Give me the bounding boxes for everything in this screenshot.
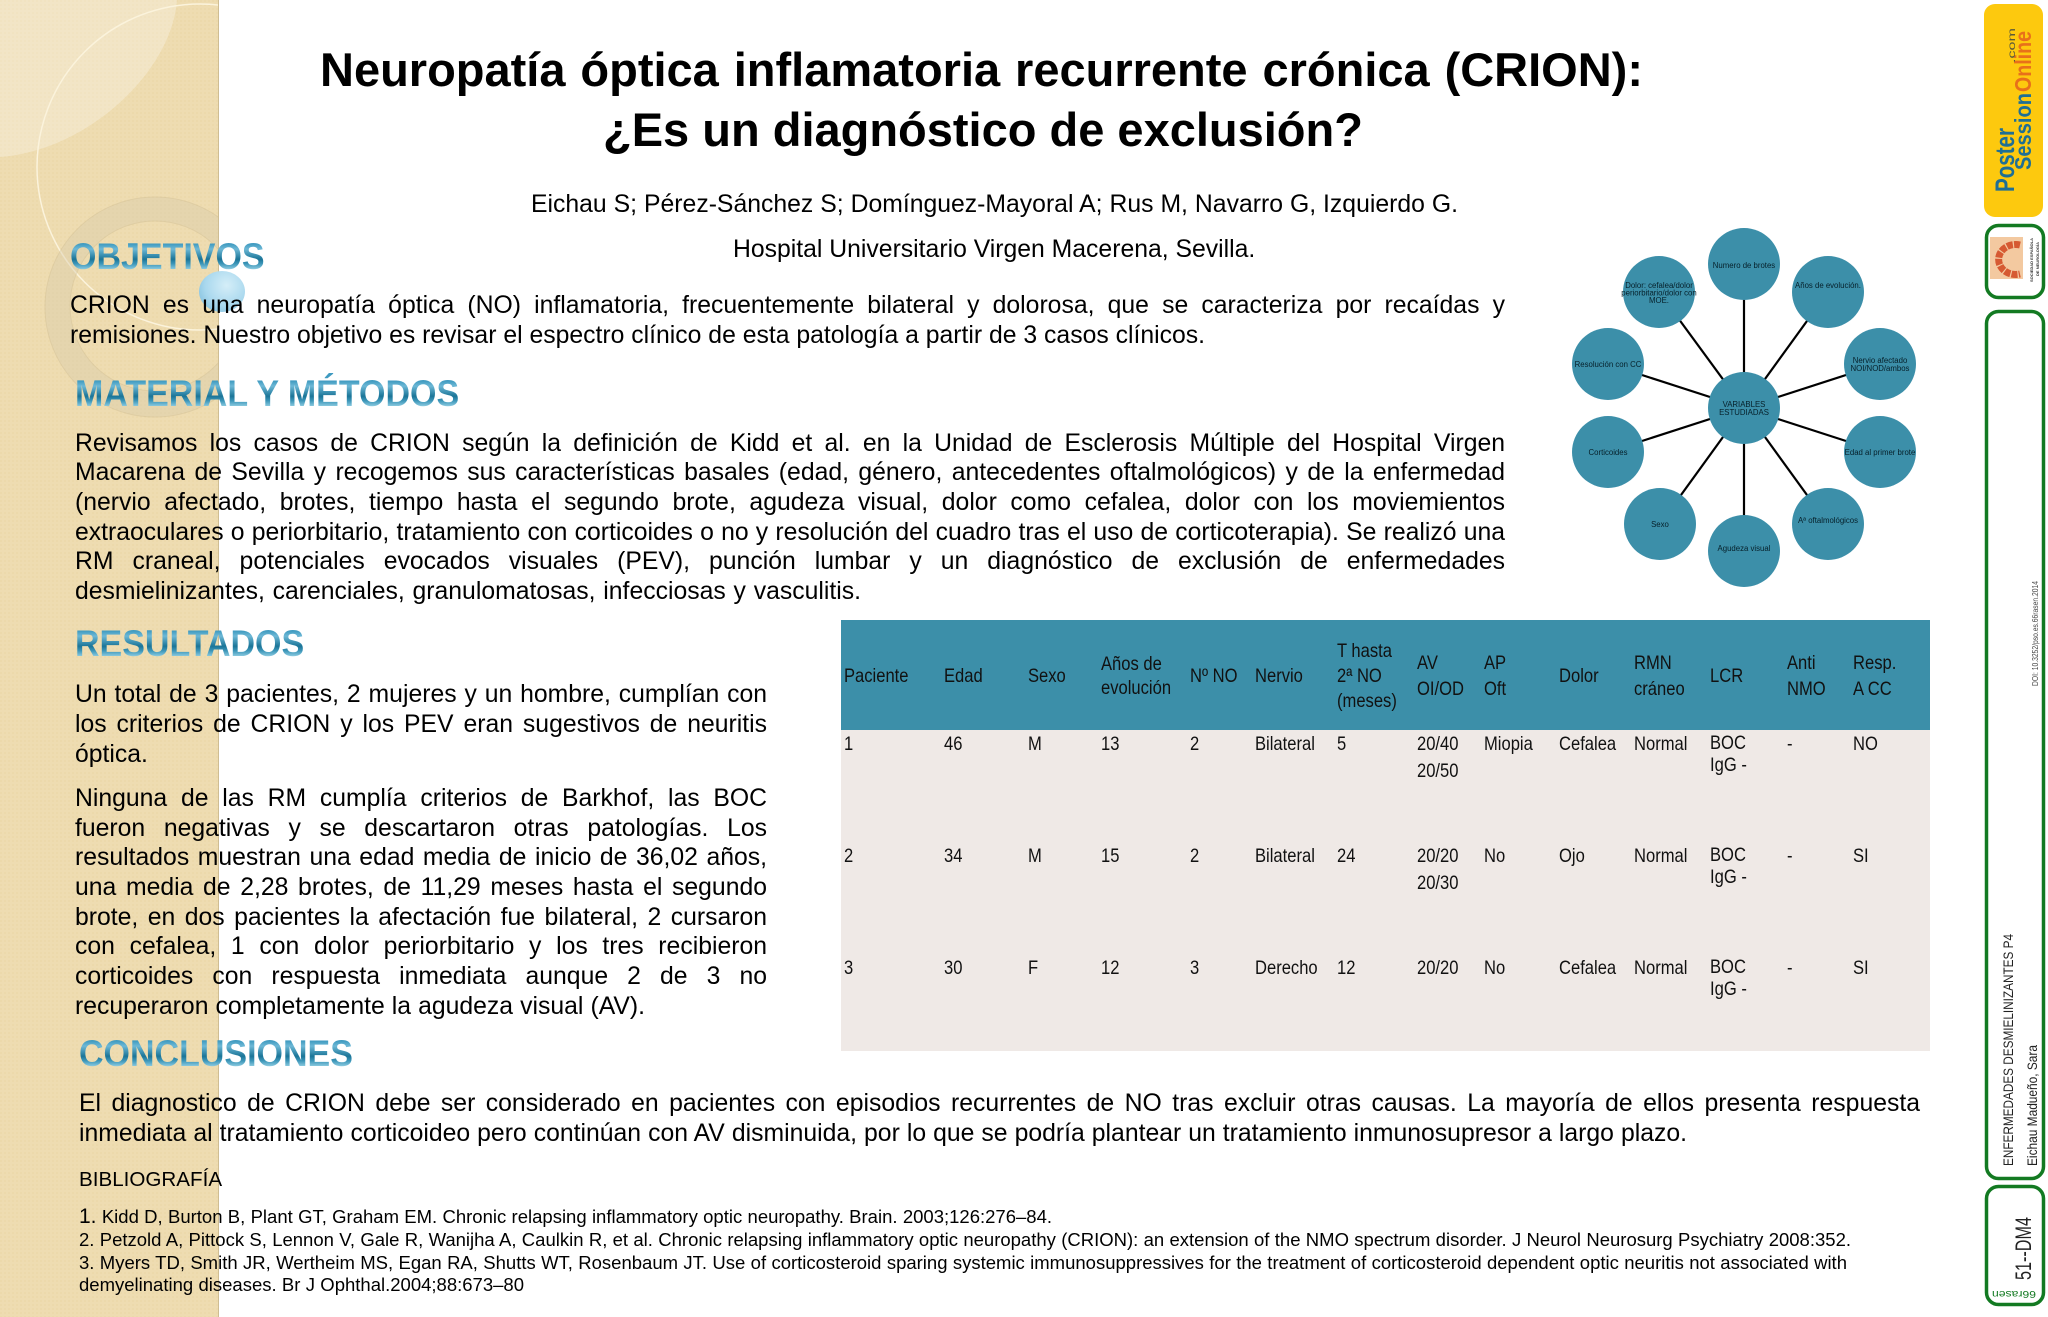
- table row: patient 2: 20/30: [1417, 872, 1458, 894]
- text: material y metodos: RM craneal, potenciales evocados visuales (PEV), punción lumbar y un diagnóstico de exclusión de enfermedades: [75, 548, 1505, 575]
- logo: sociedad de neurologia: SOCIEDAD ESPAÑOLA: [2029, 238, 2034, 282]
- text: objetivos: CRION es una neuropatía óptica (NO) inflamatoria, frecuentemente bilateral y dolorosa, que se caracteriza por recaídas y: [70, 292, 1505, 319]
- logo: sociedad de neurologia: [1986, 226, 2044, 298]
- logo: PosterSessionOnline: .com: [2007, 28, 2018, 63]
- table header row: Nervio: [1255, 665, 1303, 687]
- text: resultados: Ninguna de las RM cumplía criterios de Barkhof, las BOC: [75, 785, 767, 812]
- table header row: Años de: [1101, 653, 1162, 675]
- diagram: variables estudiadas: Dolor: cefalea/dolor: [1625, 281, 1693, 290]
- table header row: Oft: [1484, 678, 1506, 700]
- text: material y metodos: desmielinizantes, carenciales, granulomatosas, infecciosas y vasculitis.: [75, 578, 861, 605]
- table header row: A CC: [1853, 678, 1892, 700]
- references: 3. Myers TD, Smith JR, Wertheim MS, Egan RA, Shutts WT, Rosenbaum JT. Use of corticosteroid sparing systemic immunosuppressives for the treatment of corticosteroid dependent optic neuritis not associated with: [79, 1252, 1847, 1272]
- diagram: variables estudiadas: MOE.: [1649, 296, 1669, 305]
- text: conclusiones: [79, 1090, 1920, 1147]
- table row: patient 1: 20/50: [1417, 760, 1458, 782]
- panel: poster code: 51--DM4: [2011, 1217, 2036, 1280]
- table row: patient 3: Cefalea: [1559, 957, 1616, 979]
- text: material y metodos: extraoculares o periorbitario, tratamiento con corticoides o no y resolución del cuadro tras el uso de corticoterapia). Se realizó una: [75, 519, 1505, 546]
- table row: patient 1: 20/40: [1417, 733, 1458, 755]
- table row: patient 1: Cefalea: [1559, 733, 1616, 755]
- table header row: AV: [1417, 652, 1438, 674]
- text: resultados: [75, 681, 767, 1020]
- panel: poster information: [1986, 312, 2044, 1178]
- table row: patient 1: BOC: [1710, 732, 1746, 754]
- left decorative sidebar: [0, 0, 219, 1317]
- table row: patient 3: 20/20: [1417, 957, 1458, 979]
- table row: patient 2: IgG -: [1710, 866, 1747, 888]
- diagram: variables estudiadas: NOI/NOD/ambos: [1851, 364, 1910, 373]
- diagram: variables estudiadas: Corticoides: [1588, 448, 1628, 457]
- table row: patient 2: Bilateral: [1255, 845, 1315, 867]
- table row: patient 1: M: [1028, 733, 1042, 755]
- table row: patient 2: 2: [844, 845, 853, 867]
- table: patient data: [841, 620, 1930, 1051]
- table row: patient 1: 46: [944, 733, 962, 755]
- table row: patient 3: IgG -: [1710, 978, 1747, 1000]
- logo: PosterSessionOnline: Session: [2010, 93, 2036, 170]
- table row: patient 1: Miopia: [1484, 733, 1533, 755]
- table row: patient 2: BOC: [1710, 844, 1746, 866]
- text: resultados: recuperaron completamente la agudeza visual (AV).: [75, 993, 645, 1020]
- text: material y metodos: (nervio afectado, brotes, tiempo hasta el segundo brote, agudeza visual, dolor como cefalea, dolor con los moviemientos: [75, 489, 1505, 516]
- table header row: cráneo: [1634, 678, 1685, 700]
- table row: patient 1: [844, 732, 1878, 782]
- table row: patient 3: Derecho: [1255, 957, 1318, 979]
- text: resultados: Un total de 3 pacientes, 2 mujeres y un hombre, cumplían con: [75, 681, 767, 708]
- text: conclusiones: inmediata al tratamiento corticoideo pero continúan con AV disminuida, por lo que se podría plantear un tratamiento inmunosupresor a largo plazo.: [79, 1120, 1687, 1147]
- table row: patient 1: 5: [1337, 733, 1346, 755]
- diagram: variables estudiadas: Sexo: [1651, 520, 1670, 529]
- table row: patient 3: No: [1484, 957, 1505, 979]
- logo: PosterSessionOnline: [1984, 4, 2043, 217]
- table header row: RMN: [1634, 652, 1672, 674]
- diagram: variables estudiadas: periorbitario/dolor con: [1621, 288, 1697, 298]
- right sidebar: poster session: [1984, 4, 2046, 1306]
- table header row: NMO: [1787, 678, 1826, 700]
- table header row: Edad: [944, 665, 983, 687]
- diagram: variables estudiadas: Resolución con CC: [1575, 360, 1642, 369]
- text: resultados: brote, en dos pacientes la afectación fue bilateral, 2 cursaron: [75, 904, 767, 931]
- panel: poster information: Eichau Madueño, Sara: [2024, 1045, 2040, 1166]
- diagram: variables estudiadas: Edad al primer brote: [1845, 448, 1915, 457]
- references: 1. Kidd D, Burton B, Plant GT, Graham EM. Chronic relapsing inflammatory optic neuropathy. Brain. 2003;126:276–84.: [79, 1205, 1052, 1228]
- text: material y metodos: Revisamos los casos de CRION según la definición de Kidd et al. en la Unidad de Esclerosis Múltiple del Hospital Virgen: [75, 430, 1505, 456]
- text: resultados: fueron negativas y se descartaron otras patologías. Los: [75, 815, 767, 842]
- text: objetivos: [70, 292, 1505, 349]
- table row: patient 2: M: [1028, 845, 1042, 867]
- diagram: variables estudiadas: Aª oftalmológicos: [1798, 516, 1858, 525]
- table row: patient 1: 2: [1190, 733, 1199, 755]
- table header row: [841, 620, 1930, 730]
- table row: patient 1: Bilateral: [1255, 733, 1315, 755]
- table row: patient 2: SI: [1853, 845, 1869, 867]
- table row: patient 2: 24: [1337, 845, 1355, 867]
- table row: patient 2: 20/20: [1417, 845, 1458, 867]
- table header row: evolución: [1101, 677, 1171, 699]
- table row: patient 1: IgG -: [1710, 754, 1747, 776]
- table header row: Nº NO: [1190, 665, 1237, 687]
- table header row: OI/OD: [1417, 678, 1464, 700]
- text: resultados: una media de 2,28 brotes, de 11,29 meses hasta el segundo: [75, 874, 767, 901]
- table header row: Resp.: [1853, 652, 1896, 674]
- table row: patient 2: Ojo: [1559, 845, 1585, 867]
- heading: resultados: RESULTADOS: [75, 623, 304, 665]
- table row: patient 1: -: [1787, 733, 1793, 755]
- diagram: variables estudiadas: Numero de brotes: [1713, 261, 1775, 270]
- table row: patient 3: 3: [844, 957, 853, 979]
- title: Neuropatía óptica inflamatoria recurrente crónica (CRION):: [320, 43, 1643, 96]
- table row: patient 3: F: [1028, 957, 1038, 979]
- panel: poster information: DOI: 10.3252/pso.es.66rasen.2014: [2030, 581, 2040, 686]
- text: resultados: óptica.: [75, 741, 148, 768]
- table row: patient 3: -: [1787, 957, 1793, 979]
- icon: decorative bubble: [199, 271, 245, 312]
- table row: patient 1: NO: [1853, 733, 1878, 755]
- authors: Eichau S; Pérez-Sánchez S; Domínguez-Mayoral A; Rus M, Navarro G, Izquierdo G.: [531, 191, 1458, 218]
- logo: sociedad de neurologia: DE NEUROLOGÍA: [2035, 242, 2040, 276]
- table row: patient 2: 34: [944, 845, 962, 867]
- diagram: variables estudiadas: Años de evolución.: [1795, 281, 1861, 290]
- diagram: variables estudiadas: VARIABLES: [1723, 400, 1765, 409]
- table row: patient 1: Normal: [1634, 733, 1687, 755]
- table row: patient 2: 15: [1101, 845, 1119, 867]
- table row: patient 2: No: [1484, 845, 1505, 867]
- table header row: Anti: [1787, 652, 1816, 674]
- title: [320, 43, 1643, 156]
- references: demyelinating diseases. Br J Ophthal.2004;88:673–80: [79, 1274, 524, 1295]
- table row: patient 3: SI: [1853, 957, 1869, 979]
- heading: conclusiones: CONCLUSIONES: [79, 1033, 353, 1075]
- table row: patient 3: 12: [1337, 957, 1355, 979]
- heading: material y metodos: MATERIAL Y MÉTODOS: [75, 373, 459, 415]
- text: resultados: resultados muestran una edad media de inicio de 36,02 años,: [75, 844, 767, 871]
- panel: poster information: ENFERMEDADES DESMIELINIZANTES P4: [2000, 934, 2016, 1166]
- table row: patient 3: Normal: [1634, 957, 1687, 979]
- table row: patient 1: 13: [1101, 733, 1119, 755]
- text: resultados: corticoides con respuesta inmediata aunque 2 de 3 no: [75, 963, 767, 990]
- table header row: (meses): [1337, 690, 1397, 712]
- table row: patient 3: [844, 956, 1869, 1000]
- references: [79, 1205, 1851, 1295]
- table row: patient 1: 1: [844, 733, 853, 755]
- heading: objetivos: OBJETIVOS: [70, 236, 265, 278]
- diagram: variables estudiadas: [1572, 228, 1916, 587]
- table row: patient 3: 12: [1101, 957, 1119, 979]
- text: material y metodos: Macarena de Sevilla y recogemos sus características basales (edad, género, antecedentes oftalmológicos) y de la enfermedad: [75, 459, 1505, 486]
- table header row: Sexo: [1028, 665, 1066, 687]
- table header row: AP: [1484, 652, 1506, 674]
- diagram: variables estudiadas: Agudeza visual: [1718, 544, 1771, 553]
- logo: PosterSessionOnline: Poster: [1990, 128, 2020, 192]
- text: resultados: los criterios de CRION y los PEV eran sugestivos de neuritis: [75, 711, 767, 738]
- table header row: LCR: [1710, 665, 1743, 687]
- table row: patient 2: Normal: [1634, 845, 1687, 867]
- table header row: T hasta: [1337, 640, 1392, 662]
- text: conclusiones: El diagnostico de CRION debe ser considerado en pacientes con episodios recurrentes de NO tras excluir otras causas. La mayoría de ellos presenta respuesta: [79, 1090, 1920, 1117]
- table row: patient 2: 2: [1190, 845, 1199, 867]
- panel: poster code: [1986, 1186, 2044, 1304]
- diagram: variables estudiadas: ESTUDIADAS: [1719, 408, 1769, 417]
- panel: poster code: 66rasen: [1992, 1288, 2036, 1300]
- table row: patient 3: 3: [1190, 957, 1199, 979]
- table row: patient 3: 30: [944, 957, 962, 979]
- diagram: variables estudiadas: Nervio afectado: [1853, 356, 1908, 365]
- heading: bibliografia: BIBLIOGRAFÍA: [79, 1168, 222, 1191]
- table header row: Paciente: [844, 665, 909, 687]
- table row: patient 3: BOC: [1710, 956, 1746, 978]
- logo: PosterSessionOnline: Online: [2010, 31, 2036, 92]
- affiliation: Hospital Universitario Virgen Macerena, Sevilla.: [733, 236, 1255, 263]
- text: material y metodos: [75, 430, 1505, 605]
- references: 2. Petzold A, Pittock S, Lennon V, Gale R, Wanijha A, Caulkin R, et al. Chronic relapsing inflammatory optic neuropathy (CRION): an extension of the NMO spectrum disorder. J Neurol Neurosurg Psychiatry 2008:352.: [79, 1229, 1851, 1250]
- title: ¿Es un diagnóstico de exclusión?: [603, 103, 1363, 156]
- table row: patient 2: [844, 844, 1869, 894]
- text: objetivos: remisiones. Nuestro objetivo es revisar el espectro clínico de esta patología a partir de 3 casos clínicos.: [70, 322, 1205, 349]
- table row: patient 2: -: [1787, 845, 1793, 867]
- text: resultados: con cefalea, 1 con dolor periorbitario y los tres recibieron: [75, 933, 767, 960]
- table header row: 2ª NO: [1337, 665, 1382, 687]
- table header row: Dolor: [1559, 665, 1599, 687]
